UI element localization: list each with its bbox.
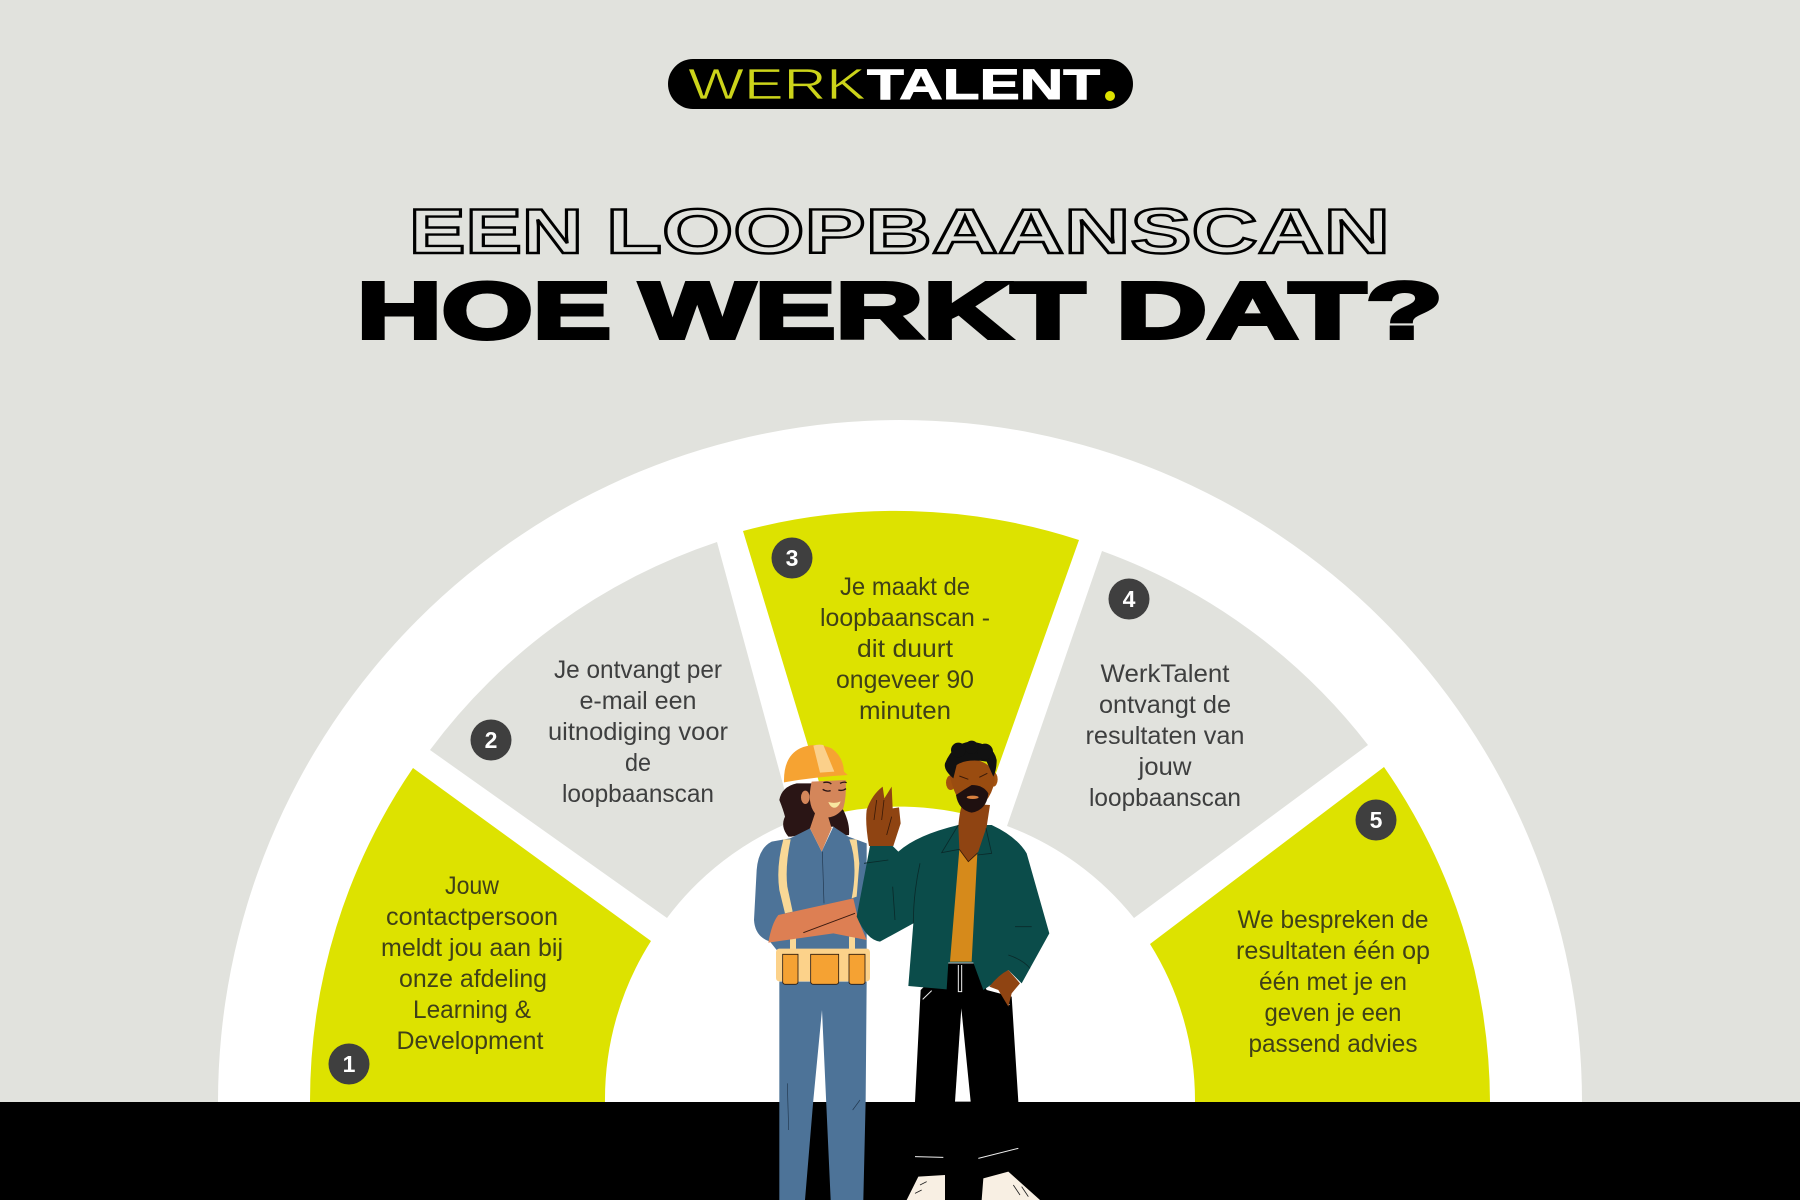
step 4 text: WerkTalent <box>1100 660 1230 688</box>
step 5 text: geven je een <box>1264 999 1402 1027</box>
step 4 text: ontvangt de <box>1099 691 1231 719</box>
title line 1: outlined <box>409 197 1390 267</box>
title line 2: heavy: WERKT <box>640 266 1085 355</box>
segment 2 panel <box>430 542 793 918</box>
title line 2: heavy <box>357 266 1443 355</box>
logo: WerkTalent: WERK <box>688 60 866 109</box>
title line 2: heavy: DAT? <box>1116 266 1443 355</box>
title line 1: outlined: LOOPBAANSCAN <box>606 197 1390 267</box>
step 3 text: minuten <box>859 697 951 725</box>
step 5 text: passend advies <box>1248 1030 1418 1058</box>
step 2 text: Je ontvangt per <box>554 656 722 684</box>
illustration: man in green jacket <box>857 741 1049 1200</box>
illustration: construction worker woman <box>754 745 870 1200</box>
step 1 text: contactpersoon <box>386 903 558 931</box>
step 1 number badge <box>328 1044 370 1084</box>
title line 2: heavy: HOE <box>357 266 611 355</box>
step 5 text: We bespreken de <box>1238 906 1428 934</box>
step 1 text: Development <box>396 1027 544 1055</box>
step 2 number badge: 2 <box>485 727 497 753</box>
step 1 text: onze afdeling <box>399 965 547 993</box>
step 3 number badge: 3 <box>786 545 798 571</box>
step 4 number badge: 4 <box>1123 586 1136 612</box>
step 2 text: e-mail een <box>580 687 696 715</box>
step 3 text: loopbaanscan - <box>820 604 990 632</box>
segment 4 panel <box>1007 551 1368 918</box>
step 5 text: resultaten één op <box>1236 937 1430 965</box>
step 4 text: jouw <box>1137 753 1192 781</box>
step 5 number badge <box>1356 800 1396 840</box>
step 5 text: één met je en <box>1259 968 1407 996</box>
step 4 text <box>1086 660 1244 812</box>
title <box>357 197 1443 355</box>
step 3 text: ongeveer 90 <box>836 666 974 694</box>
step 3 text <box>820 573 990 725</box>
step 2 number badge <box>470 720 512 760</box>
segment 1 panel <box>310 768 651 1102</box>
white semicircle wheel <box>218 420 1582 1102</box>
step 1 number badge: 1 <box>343 1051 356 1077</box>
step 3 number badge <box>772 538 812 578</box>
step 2 text: de <box>625 749 651 777</box>
logo: WerkTalent <box>668 59 1133 109</box>
step 1 text: Learning & <box>413 996 531 1024</box>
title line 1: outlined: EEN <box>409 197 583 267</box>
step 1 text <box>381 872 563 1055</box>
segment 3 panel <box>743 511 1079 818</box>
step 2 text: loopbaanscan <box>562 780 714 808</box>
step 3 text: Je maakt de <box>840 573 970 601</box>
step 4 text: loopbaanscan <box>1089 784 1241 812</box>
step 5 number badge: 5 <box>1370 807 1383 833</box>
step 1 text: meldt jou aan bij <box>381 934 563 962</box>
logo: WerkTalent: TALENT <box>867 61 1100 109</box>
step 1 text: Jouw <box>445 872 500 900</box>
step 5 text <box>1236 906 1430 1058</box>
black footer band <box>0 1102 1800 1200</box>
step 2 text: uitnodiging voor <box>548 718 728 746</box>
step 4 text: resultaten van <box>1086 722 1244 750</box>
step 3 text: dit duurt <box>857 635 953 663</box>
step 4 number badge <box>1108 578 1150 620</box>
step 2 text <box>548 656 728 808</box>
segment 5 panel <box>1150 767 1490 1102</box>
